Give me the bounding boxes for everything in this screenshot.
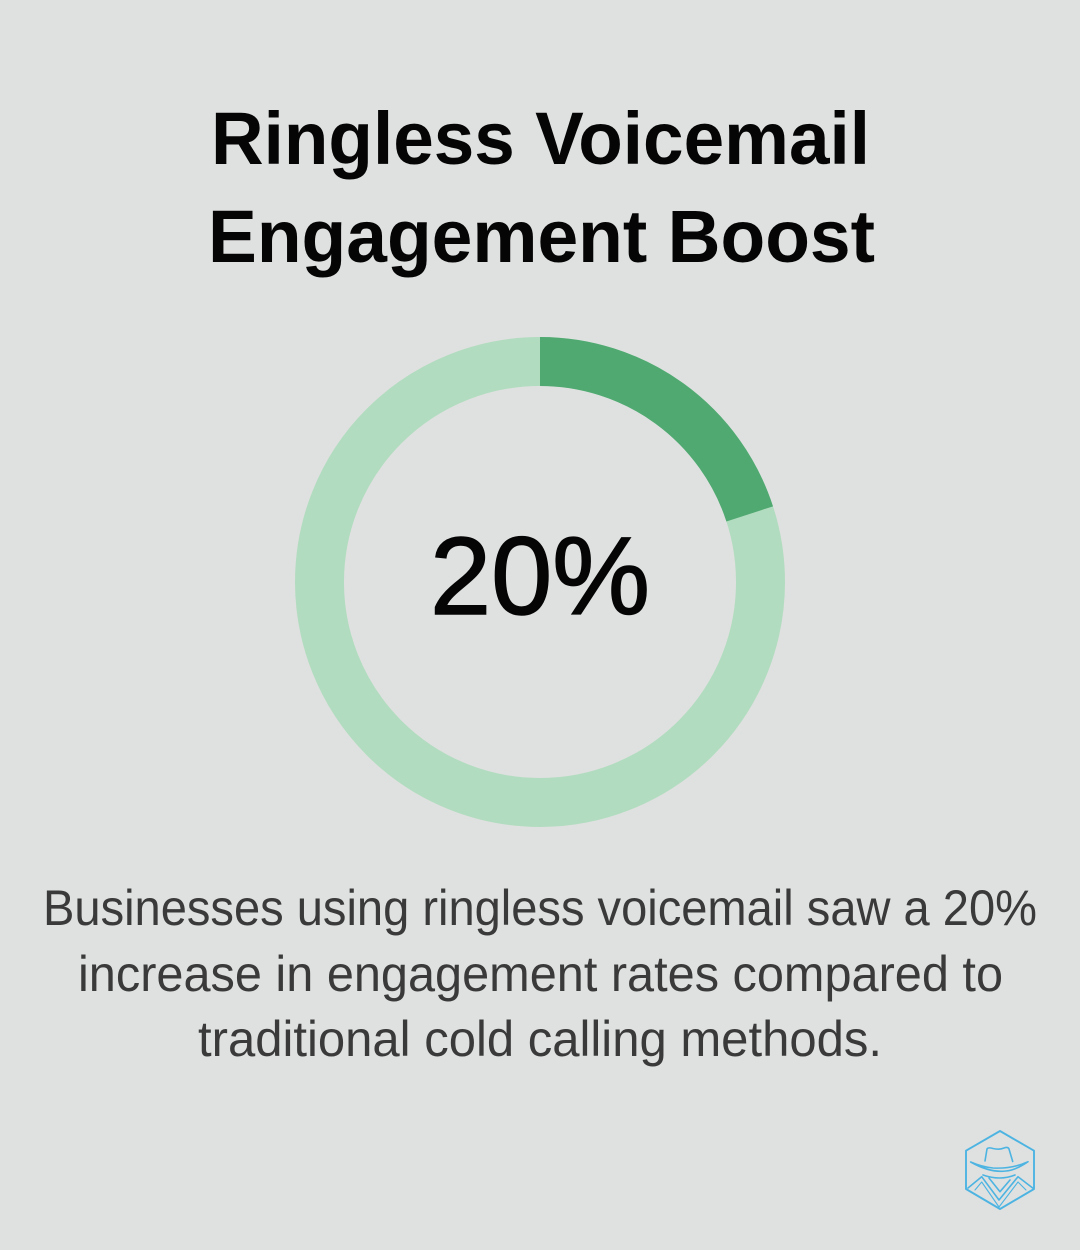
title (208, 97, 875, 278)
description text: traditional cold calling methods. (198, 1011, 882, 1067)
donut chart: 20% (320, 362, 760, 802)
icon: hexagon spy logo (966, 1131, 1034, 1209)
title: Engagement Boost (208, 195, 875, 278)
title: Ringless Voicemail (211, 97, 870, 180)
description text (43, 880, 1037, 1067)
donut value: 20% (430, 515, 650, 638)
description text: increase in engagement rates compared to (78, 946, 1003, 1002)
description text: Businesses using ringless voicemail saw a 20% (43, 880, 1037, 936)
